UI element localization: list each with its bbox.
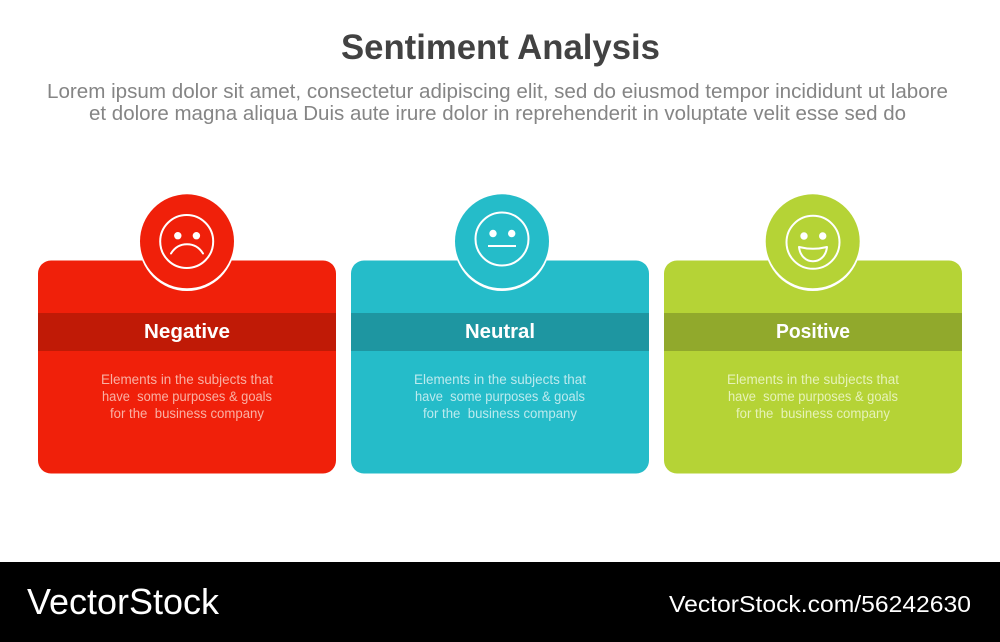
card: negative background: [38, 260, 336, 474]
description: neutral: have some purposes & goals: [415, 389, 585, 404]
description: neutral: for the business company: [423, 406, 577, 421]
heading: negative: Negative: [144, 321, 230, 343]
footer logo text: VectorStock: [27, 581, 220, 622]
band: neutral heading bar: [351, 313, 649, 351]
panel: negative: [38, 194, 336, 474]
icon: neutral face badge: [454, 194, 550, 291]
description: positive: [727, 372, 899, 421]
subtitle text: Lorem ipsum dolor sit amet, consectetur adipiscing elit, sed do eiusmod tempor incididunt ut labore: [47, 80, 948, 103]
panel: neutral: [351, 194, 649, 474]
card: positive background: [664, 260, 962, 474]
description: neutral: Elements in the subjects that: [414, 372, 586, 387]
description: positive: Elements in the subjects that: [727, 372, 899, 387]
description: positive: have some purposes & goals: [728, 389, 898, 404]
description: negative: [101, 372, 273, 421]
icon: happy face badge: [765, 194, 861, 291]
heading: neutral: Neutral: [465, 321, 535, 343]
card: neutral background: [351, 260, 649, 474]
subtitle text: et dolore magna aliqua Duis aute irure dolor in reprehenderit in voluptate velit esse sed do: [89, 102, 906, 125]
title: Sentiment Analysis: [341, 28, 660, 67]
band: positive heading bar: [664, 313, 962, 351]
subtitle text: [47, 80, 948, 125]
heading: positive: Positive: [776, 321, 850, 343]
description: negative: have some purposes & goals: [102, 389, 272, 404]
footer image id text: VectorStock.com/56242630: [669, 591, 971, 617]
description: neutral: [414, 372, 586, 421]
panel: positive: [664, 194, 962, 474]
description: negative: for the business company: [110, 406, 264, 421]
description: negative: Elements in the subjects that: [101, 372, 273, 387]
footer bar: [0, 562, 1000, 642]
band: negative heading bar: [38, 313, 336, 351]
icon: sad face badge: [139, 194, 235, 291]
description: positive: for the business company: [736, 406, 890, 421]
